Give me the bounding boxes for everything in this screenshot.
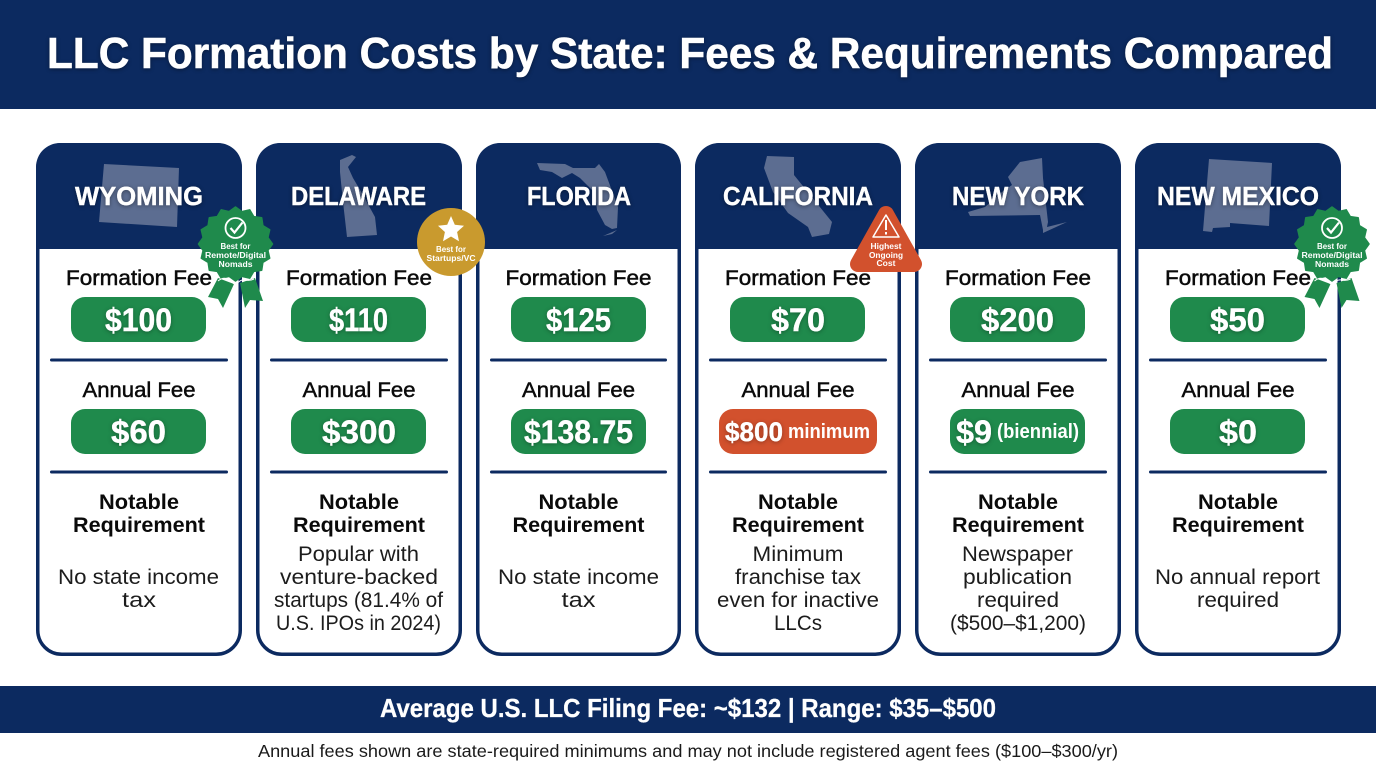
notable requirement: Requirement xyxy=(73,513,205,537)
badge: best for startups/VC (Delaware): Startups/VC xyxy=(426,253,476,263)
notable requirement: Popular with xyxy=(298,542,419,566)
formation fee: Formation Fee xyxy=(506,266,652,290)
formation fee xyxy=(66,266,212,342)
formation fee: Formation Fee xyxy=(725,266,871,290)
notable requirement: Requirement xyxy=(512,513,644,537)
formation fee xyxy=(945,266,1091,342)
notable requirement: Notable xyxy=(99,490,179,514)
map: California xyxy=(764,156,832,237)
notable requirement: Notable xyxy=(538,490,619,514)
annual fee: $138.75 xyxy=(524,414,633,450)
badge: best for remote/digital nomads (Wyoming): Best for xyxy=(220,241,251,251)
badge: best for startups/VC (Delaware) xyxy=(417,208,485,276)
notable requirement xyxy=(274,490,443,635)
notable requirement: ($500–$1,200) xyxy=(950,611,1086,635)
state name: CALIFORNIA xyxy=(723,183,873,211)
notable requirement: Requirement xyxy=(1172,513,1304,537)
badge: best for remote/digital nomads (New Mexico): Nomads xyxy=(1315,259,1349,269)
annual fee xyxy=(950,378,1085,454)
panel: New Mexico xyxy=(1135,143,1341,654)
formation fee: Formation Fee xyxy=(286,266,432,290)
notable requirement: required xyxy=(1197,588,1279,612)
annual fee: Annual Fee xyxy=(522,378,635,402)
annual fee: $0 xyxy=(1219,414,1257,450)
annual fee: $60 xyxy=(111,414,166,450)
notable requirement: U.S. IPOs in 2024) xyxy=(276,611,441,635)
notable requirement: No state income xyxy=(58,565,219,589)
annual fee xyxy=(511,378,646,454)
badge: best for remote/digital nomads (Wyoming): Nomads xyxy=(218,259,253,269)
annual fee: minimum xyxy=(788,421,870,443)
notable requirement: even for inactive xyxy=(717,588,879,612)
state name: FLORIDA xyxy=(527,183,631,211)
annual fee xyxy=(71,378,206,454)
panel: Delaware xyxy=(256,143,462,654)
formation fee xyxy=(286,266,432,342)
state name: WYOMING xyxy=(75,183,203,211)
notable requirement: LLCs xyxy=(774,611,822,635)
formation fee: $70 xyxy=(771,302,825,338)
formation fee xyxy=(725,266,871,342)
badge: best for startups/VC (Delaware): Best for xyxy=(436,244,467,254)
panel: Florida xyxy=(476,143,681,654)
formation fee: $125 xyxy=(546,302,611,338)
summary banner: Average U.S. LLC Filing Fee: ~$132 | Range: $35–$500 xyxy=(380,693,996,723)
formation fee xyxy=(1165,266,1311,342)
badge: highest ongoing cost (California) xyxy=(858,214,914,268)
notable requirement xyxy=(498,490,659,612)
map: Wyoming xyxy=(99,164,179,227)
notable requirement: startups (81.4% of xyxy=(274,588,443,612)
notable requirement: No annual report xyxy=(1155,565,1320,589)
badge: best for remote/digital nomads (New Mexico) xyxy=(1295,207,1369,308)
notable requirement: Requirement xyxy=(732,513,864,537)
badge: highest ongoing cost (California): Highest xyxy=(870,241,902,251)
annual fee: $800 xyxy=(725,417,783,447)
formation fee: Formation Fee xyxy=(66,266,212,290)
panel: New York xyxy=(915,143,1121,654)
title banner xyxy=(0,0,1376,109)
panel: California xyxy=(695,143,901,654)
annual fee: Annual Fee xyxy=(742,378,854,402)
badge: highest ongoing cost (California): Ongoing xyxy=(869,250,903,260)
annual fee: $300 xyxy=(322,414,396,450)
notable requirement: required xyxy=(977,588,1059,612)
annual fee xyxy=(719,378,877,454)
notable requirement: No state income xyxy=(498,565,659,589)
annual fee: Annual Fee xyxy=(82,378,196,402)
badge: best for remote/digital nomads (Wyoming): Remote/Digital xyxy=(205,250,266,260)
footnote: Annual fees shown are state-required minimums and may not include registered agent fees ($100–$300/yr) xyxy=(258,741,1118,761)
formation fee: $110 xyxy=(329,302,388,338)
annual fee: $9 xyxy=(956,414,992,450)
map: New Mexico xyxy=(1203,159,1272,232)
notable requirement: tax xyxy=(562,588,596,612)
state name: NEW YORK xyxy=(952,183,1085,211)
panel: Wyoming xyxy=(36,143,242,654)
formation fee: Formation Fee xyxy=(1165,266,1311,290)
annual fee: (biennial) xyxy=(997,421,1079,443)
notable requirement: venture-backed xyxy=(280,565,438,589)
map: Florida xyxy=(537,163,618,236)
formation fee: $100 xyxy=(105,302,172,338)
notable requirement xyxy=(1155,490,1320,612)
state name: NEW MEXICO xyxy=(1157,183,1319,211)
notable requirement: tax xyxy=(122,588,156,612)
badge: highest ongoing cost (California): Cost xyxy=(876,258,896,268)
formation fee: Formation Fee xyxy=(945,266,1091,290)
notable requirement: Requirement xyxy=(293,513,425,537)
badge: best for remote/digital nomads (New Mexico): Remote/Digital xyxy=(1302,250,1362,260)
formation fee xyxy=(506,266,652,342)
badge: best for remote/digital nomads (Wyoming) xyxy=(198,207,272,308)
annual fee: Annual Fee xyxy=(962,378,1074,402)
title: LLC Formation Costs by State: Fees & Requirements Compared xyxy=(47,29,1333,78)
notable requirement xyxy=(58,490,219,612)
notable requirement: Newspaper xyxy=(962,542,1073,566)
notable requirement: Notable xyxy=(319,490,399,514)
notable requirement: Notable xyxy=(978,490,1058,514)
notable requirement: Notable xyxy=(758,490,838,514)
notable requirement: Minimum xyxy=(752,542,844,566)
notable requirement xyxy=(950,490,1086,635)
annual fee xyxy=(1170,378,1305,454)
notable requirement: publication xyxy=(963,565,1072,589)
annual fee xyxy=(291,378,426,454)
map: Delaware xyxy=(340,155,377,237)
notable requirement: Notable xyxy=(1198,490,1278,514)
annual fee: Annual Fee xyxy=(302,378,416,402)
map: New York xyxy=(968,158,1067,233)
notable requirement: Requirement xyxy=(952,513,1084,537)
notable requirement: franchise tax xyxy=(735,565,861,589)
summary banner xyxy=(0,686,1376,733)
notable requirement xyxy=(717,490,879,635)
state name: DELAWARE xyxy=(291,183,426,211)
annual fee: Annual Fee xyxy=(1182,378,1294,402)
formation fee: $200 xyxy=(981,302,1054,338)
formation fee: $50 xyxy=(1210,302,1265,338)
badge: best for remote/digital nomads (New Mexico): Best for xyxy=(1317,241,1348,251)
